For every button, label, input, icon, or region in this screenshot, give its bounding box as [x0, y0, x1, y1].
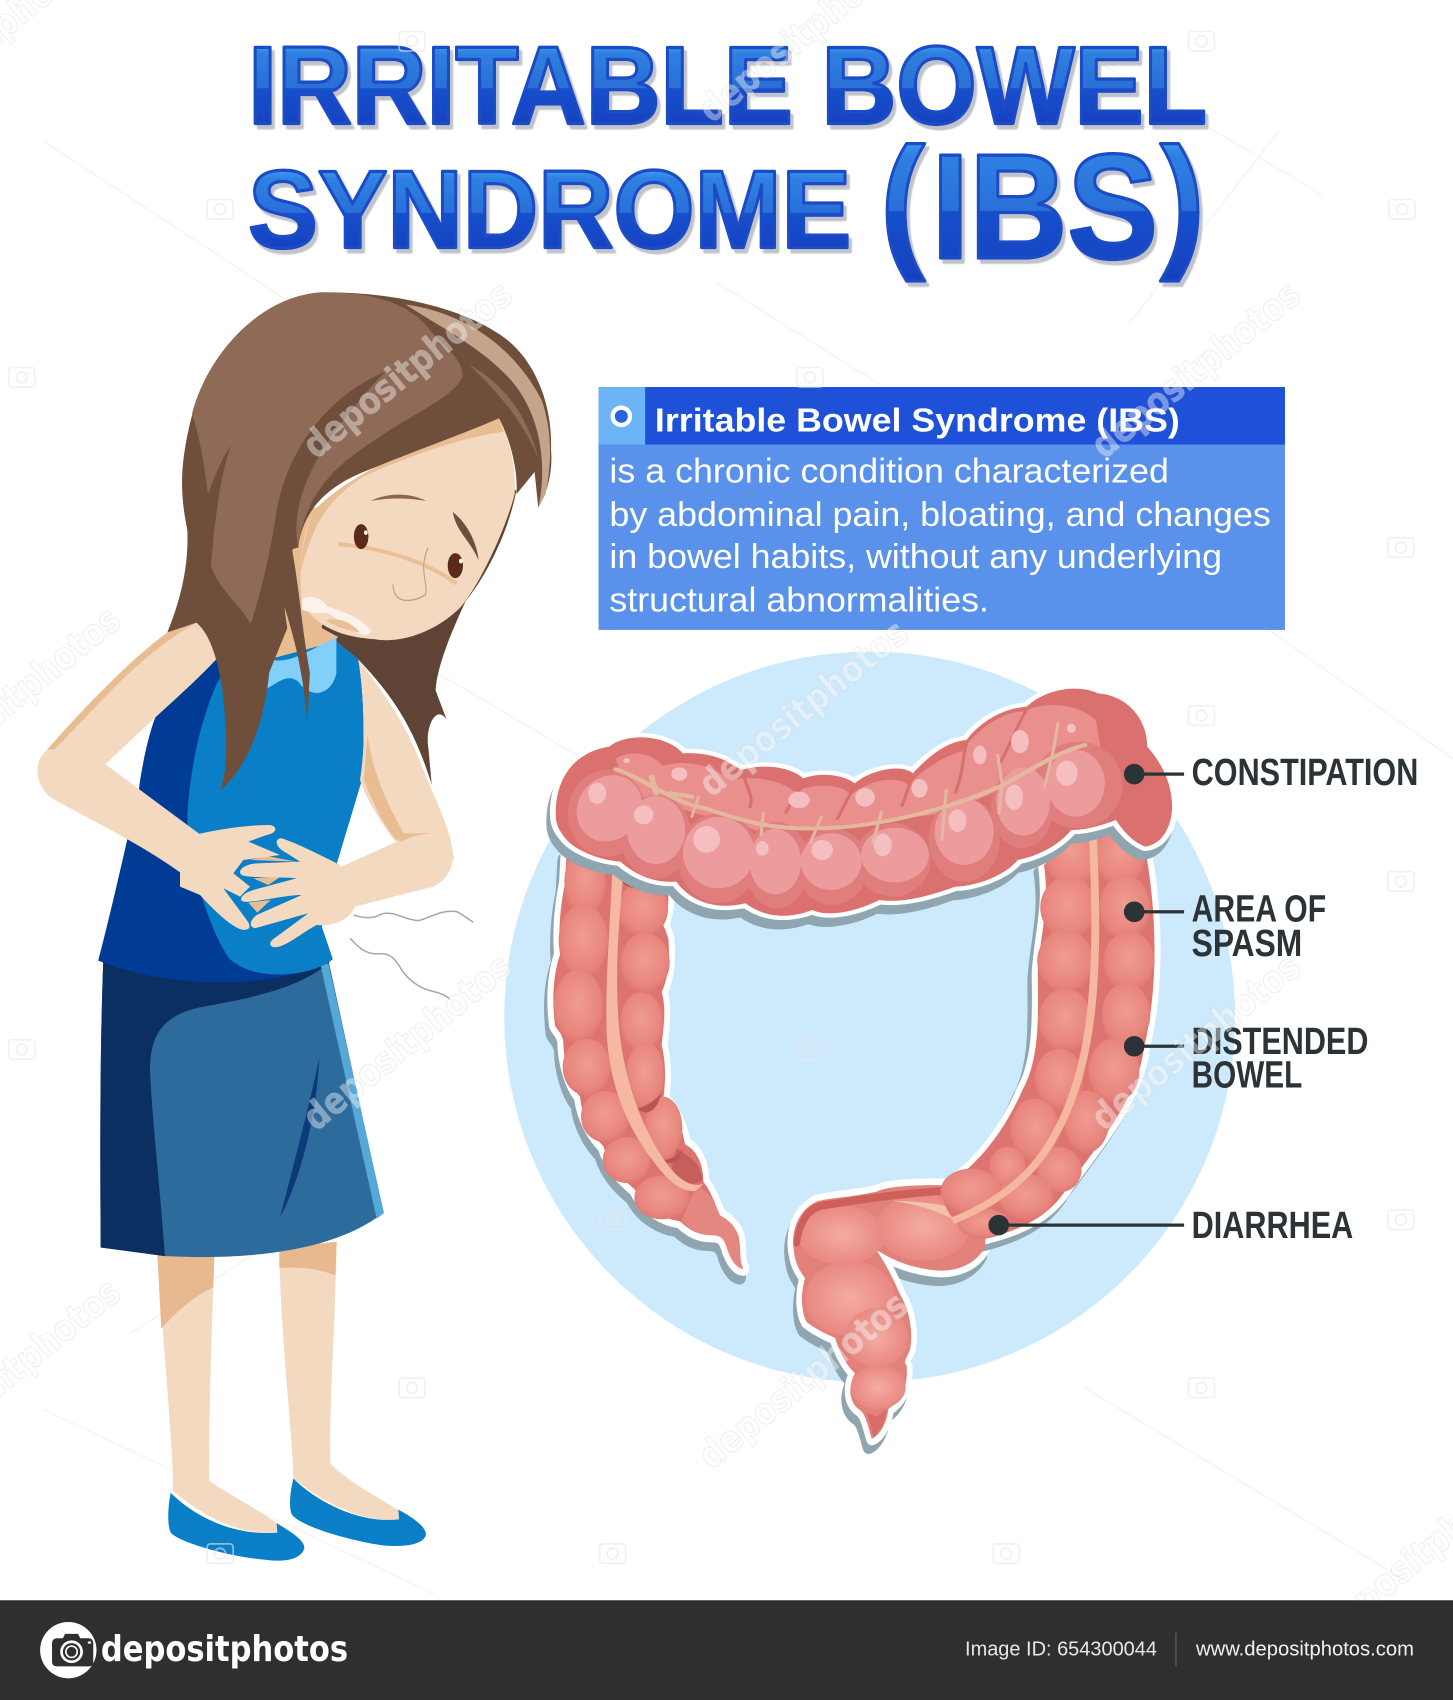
sigmoid and descending outlines — [790, 843, 1155, 1447]
footer bar — [0, 1600, 1453, 1700]
callout: area of spasm: SPASM — [1192, 923, 1302, 965]
girl: skirt and legs — [100, 960, 426, 1561]
stock watermark: depositphotos — [690, 1283, 916, 1477]
stock watermark: depositphotos — [294, 945, 520, 1139]
title: IRRITABLE BOWEL — [248, 25, 1207, 148]
callout: distended bowel — [1124, 1021, 1368, 1096]
rectum and sigmoid — [793, 1185, 987, 1439]
illustration: girl holding her stomach — [37, 292, 551, 1561]
callout: diarrhea — [988, 1205, 1353, 1247]
band and branches — [616, 723, 1085, 843]
callout: area of spasm: AREA OF — [1192, 889, 1326, 931]
icon: camera logo — [40, 1622, 97, 1678]
callout: constipation — [1124, 752, 1418, 794]
light blue circle background — [504, 652, 1235, 1382]
title: ) — [1160, 118, 1205, 282]
panel body text: is a chronic condition characterized — [609, 452, 1169, 490]
callout: area of spasm — [1124, 889, 1326, 965]
panel header bar — [599, 387, 1285, 445]
title — [248, 25, 1207, 290]
panel: IBS definition — [599, 387, 1285, 630]
title: ( — [880, 118, 925, 282]
panel body text: in bowel habits, without any underlying — [609, 538, 1222, 576]
descending colon — [941, 821, 1155, 1239]
stock watermark: depositphotos — [690, 611, 916, 805]
stock watermark: depositphotos — [1083, 945, 1309, 1139]
stock watermark: depositphotos — [294, 273, 520, 467]
ascending colon — [550, 848, 743, 1277]
callout: distended bowel: DISTENDED — [1192, 1021, 1368, 1063]
footer image id: Image ID: 654300044 — [965, 1639, 1157, 1661]
stock watermark: depositphotos — [1083, 273, 1309, 467]
title: SYNDROME — [248, 149, 851, 272]
illustration: large intestine — [550, 689, 1172, 1447]
footer logo wordmark: depositphotos — [101, 1629, 348, 1670]
girl: clasped hands and pain lines — [180, 825, 473, 1000]
lower row of haustra rims — [568, 742, 1123, 908]
panel body text — [609, 452, 1271, 619]
transverse colon — [552, 689, 1172, 925]
panel header bar: Irritable Bowel Syndrome (IBS) — [655, 403, 1180, 440]
panel body text: by abdominal pain, bloating, and changes — [609, 496, 1271, 534]
lower row of haustra — [570, 750, 1105, 894]
callout: distended bowel: BOWEL — [1192, 1054, 1302, 1096]
title: IBS — [931, 123, 1158, 290]
footer website: www.depositphotos.com — [1195, 1639, 1414, 1661]
callout: diarrhea: DIARRHEA — [1192, 1205, 1353, 1247]
panel body text: structural abnormalities. — [609, 581, 989, 619]
girl: torso, arms and head — [37, 292, 551, 982]
highlights — [588, 724, 1078, 860]
upper row of haustra — [616, 705, 1100, 833]
